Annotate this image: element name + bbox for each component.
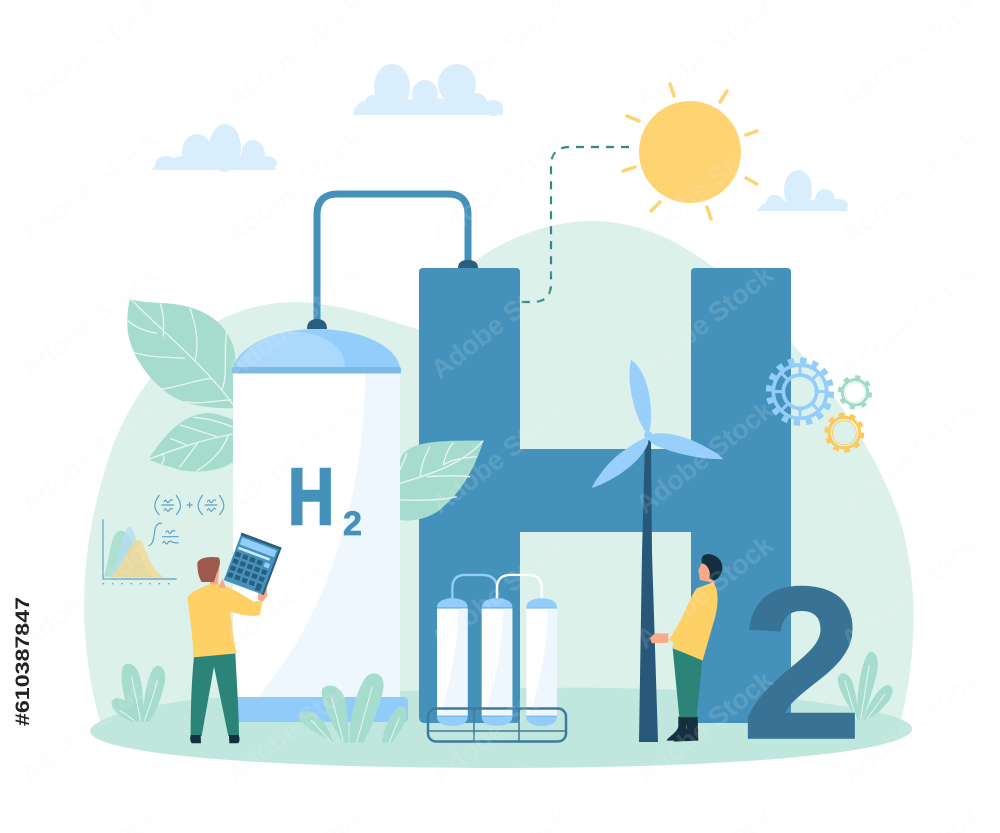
cloud: top left (152, 124, 277, 172)
hair (197, 557, 220, 582)
cloud: right (757, 170, 848, 211)
gears (769, 360, 870, 451)
plant: right (838, 652, 893, 720)
cloud: top centre (354, 64, 503, 116)
trousers (673, 648, 702, 717)
large numeral 2: 2 (741, 543, 863, 785)
background blob (84, 221, 914, 726)
man at turbine (650, 554, 722, 742)
tank label H2: H (288, 452, 334, 542)
gear: yellow (826, 415, 862, 451)
distribution chart (102, 519, 177, 584)
neck and hands (210, 568, 267, 601)
leaf: over H (400, 441, 483, 521)
plant: left (111, 664, 165, 722)
sweater (668, 582, 718, 661)
pipe between tank and H (317, 194, 468, 322)
shoes (190, 735, 240, 743)
leaf: large (127, 298, 236, 408)
hydrogen storage tank (232, 319, 408, 722)
tank label H2: 2 (343, 505, 362, 543)
pipe connector knob on H (458, 260, 478, 268)
gear: blue (769, 360, 831, 423)
boots (667, 717, 698, 742)
hands and face (650, 563, 715, 643)
large letter H (419, 268, 791, 723)
man with calculator (188, 533, 282, 743)
wind turbine (592, 360, 723, 742)
gear: green (840, 377, 870, 408)
tank label H2 (288, 452, 362, 543)
math formulas (148, 495, 224, 546)
sweater (188, 583, 263, 657)
calculator (224, 533, 282, 595)
leaf: small left (148, 413, 235, 471)
ground (90, 688, 912, 768)
plant: centre front (298, 673, 407, 743)
dashed connector from sun to H (520, 147, 629, 302)
stock image number: #610387847 (13, 597, 34, 726)
sun (623, 84, 757, 219)
rack frame (428, 708, 566, 742)
small cylinders on rack (437, 575, 557, 726)
hair (702, 554, 722, 581)
trousers (191, 653, 239, 736)
